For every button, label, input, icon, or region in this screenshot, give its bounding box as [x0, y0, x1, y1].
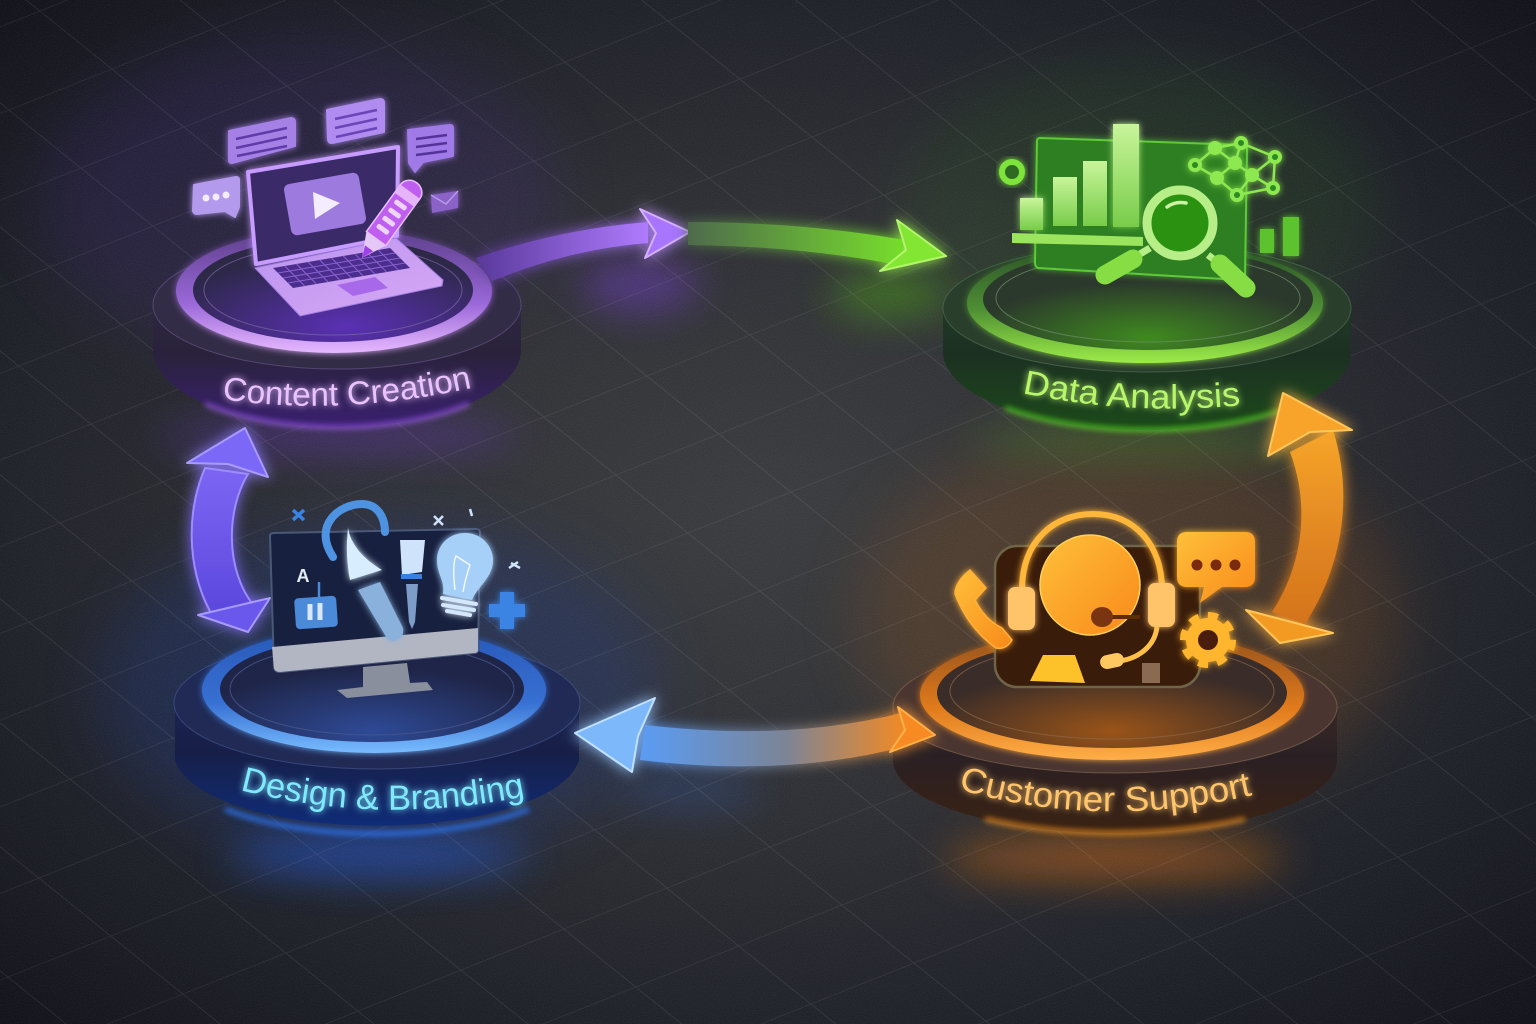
mail icon [431, 191, 458, 213]
inner line [230, 643, 514, 735]
speech bubble 1 [229, 118, 295, 163]
platform base [943, 243, 1351, 430]
headset band [1022, 514, 1162, 590]
platform top [153, 241, 521, 369]
panel: customer support platform [892, 642, 1338, 839]
label: data analysis: Data Analysis [1020, 366, 1244, 420]
letter A: A [296, 566, 310, 586]
flat brush [400, 540, 425, 629]
platform top [893, 641, 1337, 773]
speech bubble 4 [193, 177, 239, 217]
gear [1184, 616, 1232, 664]
chart panel [1035, 138, 1247, 280]
bar 3 [1083, 161, 1107, 226]
phone handset [955, 570, 1012, 648]
play triangle [313, 192, 340, 219]
inner disc [220, 636, 524, 742]
panel: content creation platform [152, 232, 522, 434]
bar 2 [1053, 177, 1077, 226]
microphone arm [1120, 627, 1157, 661]
bar 1 [1020, 198, 1043, 230]
speech bubble 2 [327, 99, 384, 143]
inner line [950, 643, 1274, 739]
icon: headset agent with phone, chat and gear [955, 514, 1255, 687]
microphone [1099, 652, 1125, 670]
video tile [283, 172, 367, 236]
monitor bezel [272, 628, 478, 672]
platform base [175, 644, 579, 826]
arrow: customer support to data analysis [1246, 393, 1352, 643]
glowing ring [967, 243, 1323, 363]
magnifier handles [1105, 248, 1246, 288]
speech bubble 3 [408, 125, 453, 172]
inner line [996, 254, 1300, 342]
small bars [1260, 217, 1299, 256]
trackpad [337, 277, 388, 296]
platform base [153, 239, 521, 427]
laptop screen [248, 147, 398, 264]
paintbrush [347, 528, 403, 641]
arrow: design and branding to content creation [187, 428, 270, 632]
small bubble icon [1002, 162, 1022, 182]
label: content creation: Content Creation [220, 367, 474, 411]
panel: data analysis platform [942, 252, 1352, 436]
inner microphone [1102, 615, 1140, 619]
icon: monitor with design tools [270, 504, 525, 698]
agent panel [995, 546, 1200, 687]
platform top [943, 244, 1351, 372]
layout box icon [294, 582, 338, 629]
shoulders [1030, 655, 1085, 683]
arrow: content creation to data analysis, purple half [476, 209, 690, 281]
pencil [352, 176, 426, 265]
platform top [174, 637, 580, 769]
platform base [893, 639, 1337, 833]
sparkles [293, 509, 520, 568]
platform rim glow [225, 809, 529, 834]
inner disc [937, 638, 1287, 748]
chart shelf [1012, 233, 1143, 246]
label: design and branding: Design & Branding [238, 763, 528, 817]
icon: data chart with magnifier and network [1002, 124, 1299, 288]
hook arc [326, 504, 385, 557]
glowing ring [202, 627, 546, 753]
platform rim glow [205, 404, 469, 427]
panel: design and branding platform [174, 634, 580, 840]
ear cups [1008, 587, 1035, 630]
arrow: content creation to data analysis, green half [688, 220, 946, 271]
inner disc [983, 248, 1313, 350]
light bulb [437, 533, 493, 615]
small square [1142, 663, 1160, 683]
lens highlight [1167, 202, 1186, 207]
monitor screen [270, 529, 480, 672]
network graph [1188, 136, 1282, 202]
chat bubble [1177, 532, 1255, 603]
magnifier lens [1147, 190, 1213, 256]
glowing ring [920, 630, 1304, 760]
agent head [1040, 535, 1140, 635]
label: customer support: Customer Support [957, 764, 1256, 820]
inner line [204, 245, 462, 335]
icon: laptop with video and speech bubbles [193, 99, 458, 316]
arrow: customer support to design and branding [575, 698, 935, 772]
platform rim glow [985, 819, 1245, 833]
platform rim glow [1005, 408, 1289, 430]
plus sign [489, 592, 525, 629]
keyboard [273, 248, 410, 288]
laptop base [255, 238, 443, 316]
inner disc [193, 238, 473, 342]
bar 4 [1113, 124, 1139, 227]
glowing ring [176, 229, 492, 353]
monitor stand [337, 663, 433, 698]
